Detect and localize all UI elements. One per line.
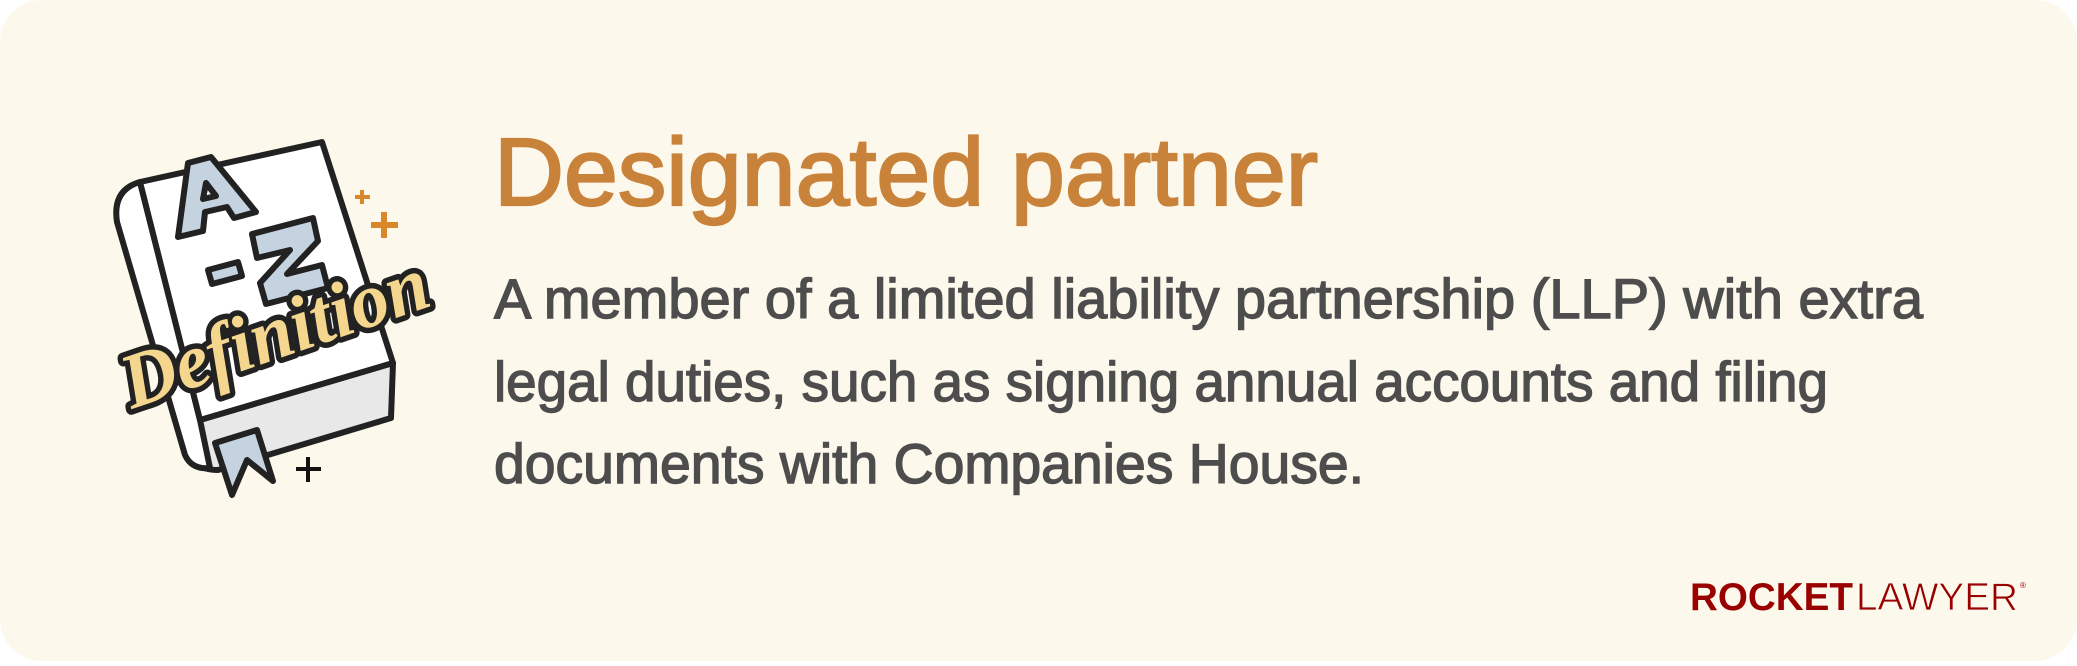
spine [116,182,210,468]
cover [140,142,393,420]
text block: definition body: documents with Companies House. [494,432,1364,495]
logo: Rocket Lawyer: ROCKET [1690,576,1853,619]
logo: Rocket Lawyer [1690,576,2026,619]
text block: definition body: legal duties, such as signing annual accounts and filing [494,350,1828,413]
text block: definition body: A member of a limited liability partnership (LLP) with extra [494,267,1924,330]
logo: Rocket Lawyer: ® [2020,581,2026,590]
page block [188,363,393,470]
letter Z [252,218,328,304]
bookmark [215,430,273,495]
icon: sparkle plus signs [296,190,398,482]
title: Designated partner [494,119,1318,226]
icon: A-Z definition book [116,142,393,495]
dash [208,262,242,284]
letter A [178,157,256,237]
text block: definition body [494,267,1924,495]
icon: Definition script label: Definition [108,239,440,425]
logo: Rocket Lawyer: LAWYER [1856,576,2018,619]
